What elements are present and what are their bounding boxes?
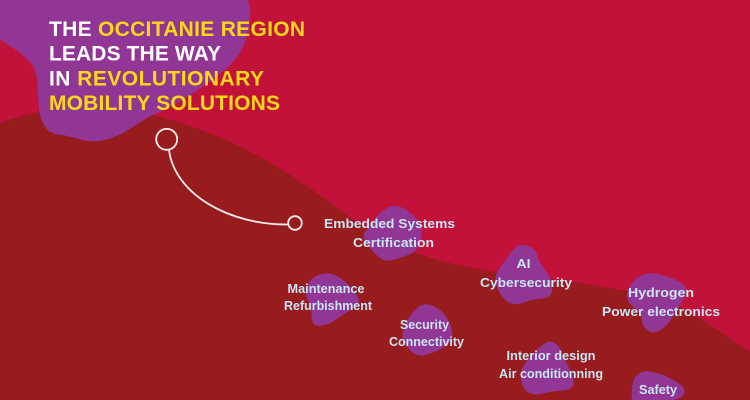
topic: interior design, air conditioning: Interior design	[506, 348, 596, 363]
topic: embedded systems, certification: Certification	[353, 235, 434, 250]
title: LEADS THE WAY	[49, 42, 221, 66]
topic: security, connectivity: Security	[400, 317, 450, 332]
title: THE OCCITANIE REGION	[49, 18, 305, 41]
topic: hydrogen, power electronics: Power electronics	[602, 304, 720, 319]
topic: maintenance, refurbishment	[284, 274, 373, 325]
title	[49, 18, 305, 115]
topic: AI, cybersecurity	[480, 246, 573, 303]
topic: hydrogen, power electronics	[602, 274, 720, 331]
topic: interior design, air conditioning	[499, 343, 603, 393]
topic: AI, cybersecurity: AI	[516, 256, 530, 271]
title: MOBILITY SOLUTIONS	[49, 92, 280, 115]
topic: maintenance, refurbishment: Maintenance	[288, 281, 364, 296]
connector arc with circles	[156, 129, 302, 230]
topic: embedded systems, certification: Embedded Systems	[324, 216, 455, 231]
title: IN REVOLUTIONARY	[49, 68, 264, 90]
topic: safety: Safety	[639, 382, 678, 397]
topic: security, connectivity: Connectivity	[389, 334, 465, 349]
topic: embedded systems, certification	[324, 207, 455, 260]
topic: hydrogen, power electronics: Hydrogen	[628, 285, 694, 300]
topic: safety	[633, 372, 684, 400]
topic: AI, cybersecurity: Cybersecurity	[480, 275, 573, 290]
topic: security, connectivity	[389, 305, 465, 355]
topic: interior design, air conditioning: Air conditionning	[499, 366, 603, 381]
title blob	[0, 0, 250, 141]
dark red hill	[0, 108, 750, 400]
topic: maintenance, refurbishment: Refurbishment	[284, 298, 373, 313]
